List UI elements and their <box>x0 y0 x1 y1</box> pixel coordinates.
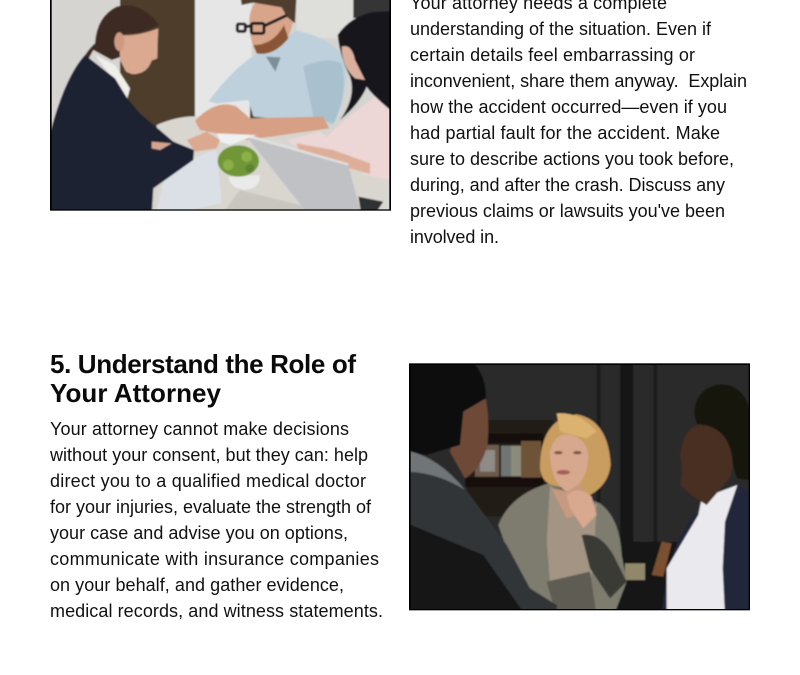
body text: role of your attorney <box>49 419 383 621</box>
body text: share details: inconvenient, share them anyway. Explain <box>410 71 747 91</box>
right woman body <box>662 486 748 609</box>
body text: share details: had partial fault for the accident. Make <box>410 123 720 143</box>
body text: role of your attorney: on your behalf, and gather evidence, <box>50 575 344 595</box>
lawyer jacket <box>47 55 194 217</box>
body text: share details: involved in. <box>410 227 499 247</box>
centre woman hair <box>540 414 611 495</box>
body text: share details: previous claims or lawsuits you've been <box>410 201 725 221</box>
left man head <box>450 395 488 478</box>
centre woman jacket <box>498 483 627 617</box>
lawyer hand <box>187 132 220 152</box>
photo: attorney meeting with a couple at a table <box>43 0 397 217</box>
body text: role of your attorney: Your attorney cannot make decisions <box>50 419 349 439</box>
body text: share details: understanding of the situation. Even if <box>410 19 712 39</box>
body text: role of your attorney: without your consent, but they can: help <box>49 445 368 465</box>
photo: three people talking in a dark office <box>403 358 757 617</box>
heading: 5. Understand the Role of Your Attorney <box>50 349 356 408</box>
body text: share details: sure to describe actions you took before, <box>410 149 734 169</box>
bookshelf <box>467 420 553 517</box>
body text: share details: how the accident occurred—even if you <box>410 97 727 117</box>
body text: share details <box>410 0 747 247</box>
woman right <box>288 96 390 180</box>
body text: role of your attorney: for your injuries, evaluate the strength of <box>50 497 372 517</box>
heading: 5. Understand the Role of Your Attorney: 5. Understand the Role of <box>50 349 356 379</box>
centre woman face <box>550 435 588 492</box>
lawyer hair <box>84 5 158 61</box>
left man shoulder and jacket <box>403 450 557 617</box>
body text: role of your attorney: communicate with insurance companies <box>50 549 379 569</box>
right woman head <box>694 384 749 439</box>
man shirt <box>208 31 346 125</box>
body text: role of your attorney: your case and advise you on options, <box>50 523 348 543</box>
body text: share details: certain details feel embarrassing or <box>410 45 695 65</box>
body text: share details: during, and after the crash. Discuss any <box>410 175 725 195</box>
man glasses <box>237 15 287 33</box>
heading: 5. Understand the Role of Your Attorney: Your Attorney <box>50 378 222 408</box>
body text: role of your attorney: medical records, and witness statements. <box>50 601 383 621</box>
body text: role of your attorney: direct you to a qualified medical doctor <box>50 471 366 491</box>
plant <box>228 175 260 190</box>
lawyer face <box>119 28 158 74</box>
notebook <box>217 133 257 145</box>
laptop <box>248 138 360 210</box>
man head <box>249 0 294 53</box>
